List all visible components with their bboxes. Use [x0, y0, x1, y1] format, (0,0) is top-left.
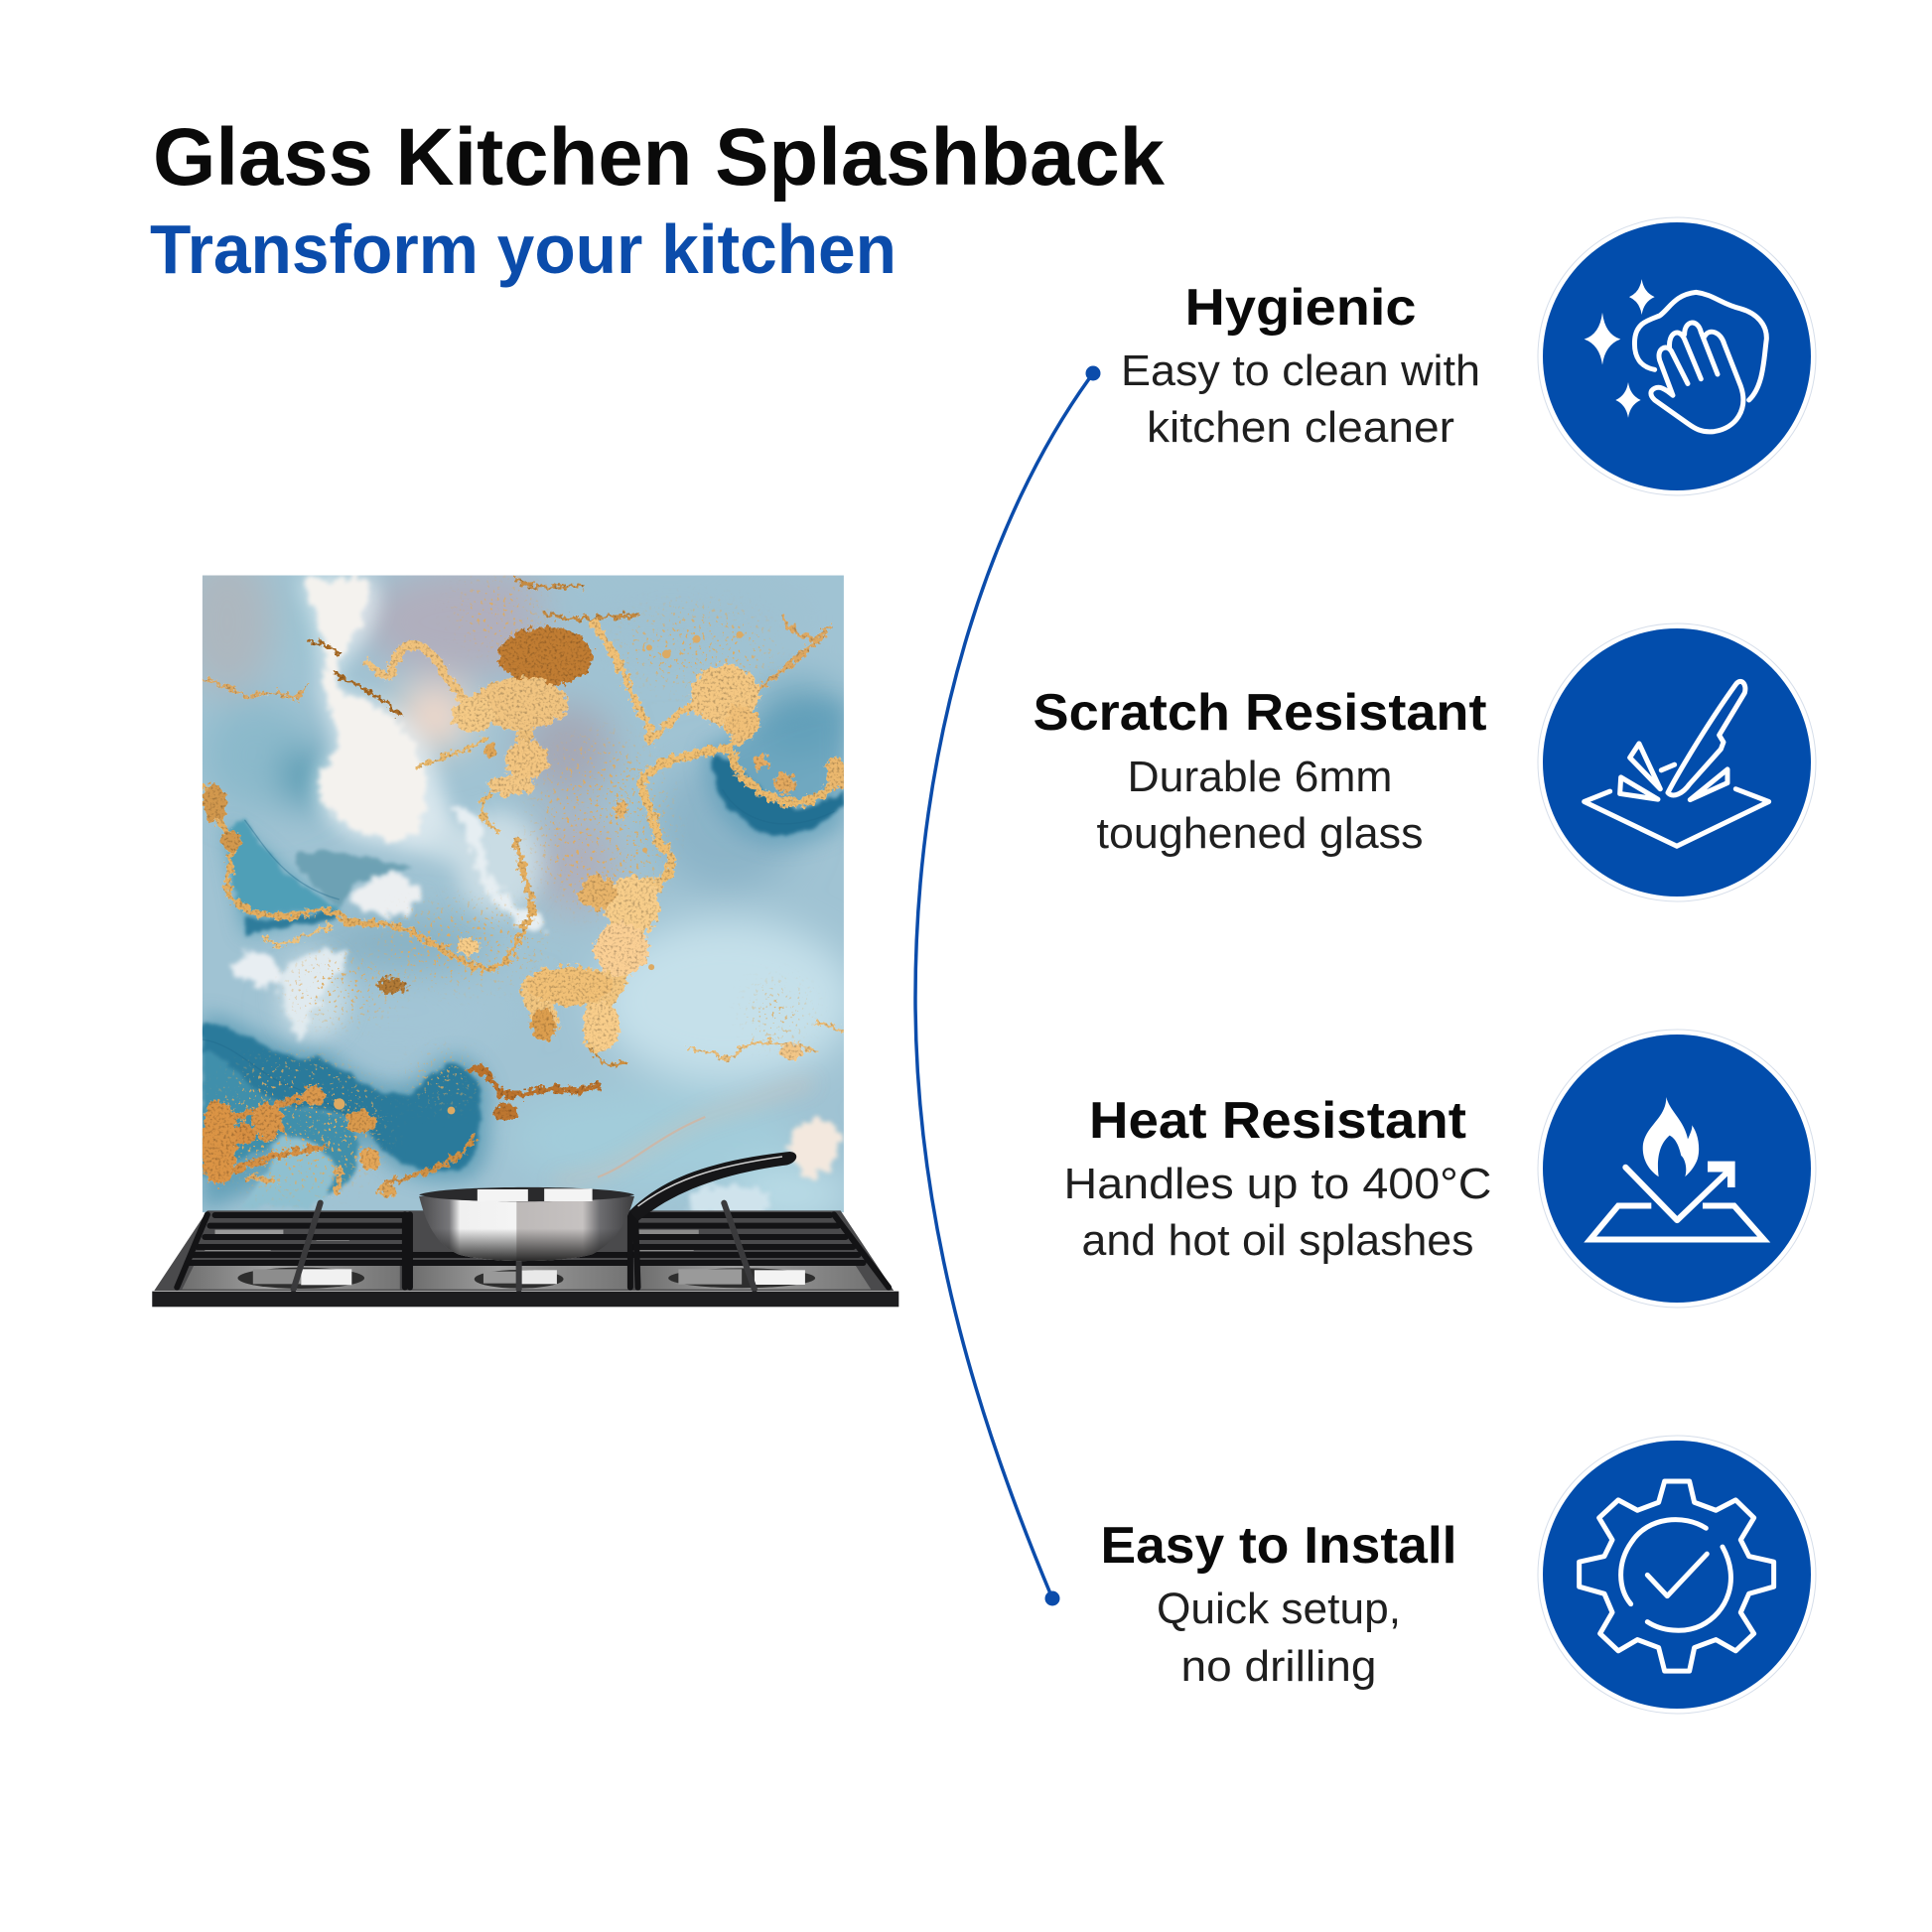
- feature: scratch resistant text: [1033, 684, 1487, 858]
- feature: hygienic text: Easy to clean with: [1121, 346, 1480, 395]
- feature: hygienic text: [1121, 279, 1480, 452]
- teal bands: soft halos: [203, 703, 844, 1211]
- grate: [177, 1203, 889, 1290]
- feature: easy to install text: Quick setup,: [1157, 1585, 1401, 1633]
- feature: hygienic text: kitchen cleaner: [1147, 403, 1454, 452]
- icon: flame and heat deflection: [1538, 1030, 1816, 1308]
- feature: easy to install text: [1100, 1517, 1457, 1691]
- connector curve with end dots: [915, 365, 1100, 1606]
- feature: heat resistant text: and hot oil splashes: [1082, 1216, 1473, 1265]
- pan handle: [629, 1152, 796, 1221]
- feature: heat resistant text: Handles up to 400°C: [1064, 1160, 1491, 1208]
- hob body: [154, 1210, 894, 1291]
- subtitle: Transform your kitchen: [150, 210, 897, 288]
- strata lines: [203, 789, 834, 1121]
- feature: scratch resistant text: Durable 6mm: [1128, 753, 1392, 801]
- white clouds: [229, 579, 839, 1216]
- icon: knife on scratch-proof glass: [1538, 623, 1816, 901]
- soft cloud glow: [279, 577, 542, 1039]
- gold speckle fields: [210, 583, 804, 1190]
- pan rim: [419, 1187, 634, 1201]
- teal bands: [203, 755, 844, 1207]
- burners: [237, 1234, 815, 1289]
- peach streak: [566, 1086, 792, 1183]
- product image: marble glass splashback: [180, 549, 856, 1224]
- feature: hygienic text: Hygienic: [1185, 279, 1416, 337]
- feature: heat resistant text: [1064, 1092, 1491, 1265]
- front rim: [152, 1292, 898, 1307]
- feature: heat resistant text: Heat Resistant: [1089, 1092, 1466, 1150]
- title: Glass Kitchen Splashback: [153, 112, 1165, 203]
- icon: gear with check mark: [1538, 1436, 1816, 1714]
- product image: gas hob with pan: [152, 1152, 898, 1307]
- gold blobs: [200, 627, 848, 1197]
- feature: scratch resistant text: toughened glass: [1096, 809, 1424, 858]
- pan bowl: [419, 1196, 634, 1261]
- icon: cleaning hand with sparkles: [1538, 217, 1816, 495]
- feature: easy to install text: Easy to Install: [1100, 1517, 1457, 1575]
- gold dots: [334, 631, 743, 1114]
- steel wells: [182, 1230, 871, 1290]
- gold veins: [203, 579, 843, 1194]
- feature: scratch resistant text: Scratch Resistant: [1033, 684, 1487, 742]
- feature: easy to install text: no drilling: [1181, 1642, 1376, 1691]
